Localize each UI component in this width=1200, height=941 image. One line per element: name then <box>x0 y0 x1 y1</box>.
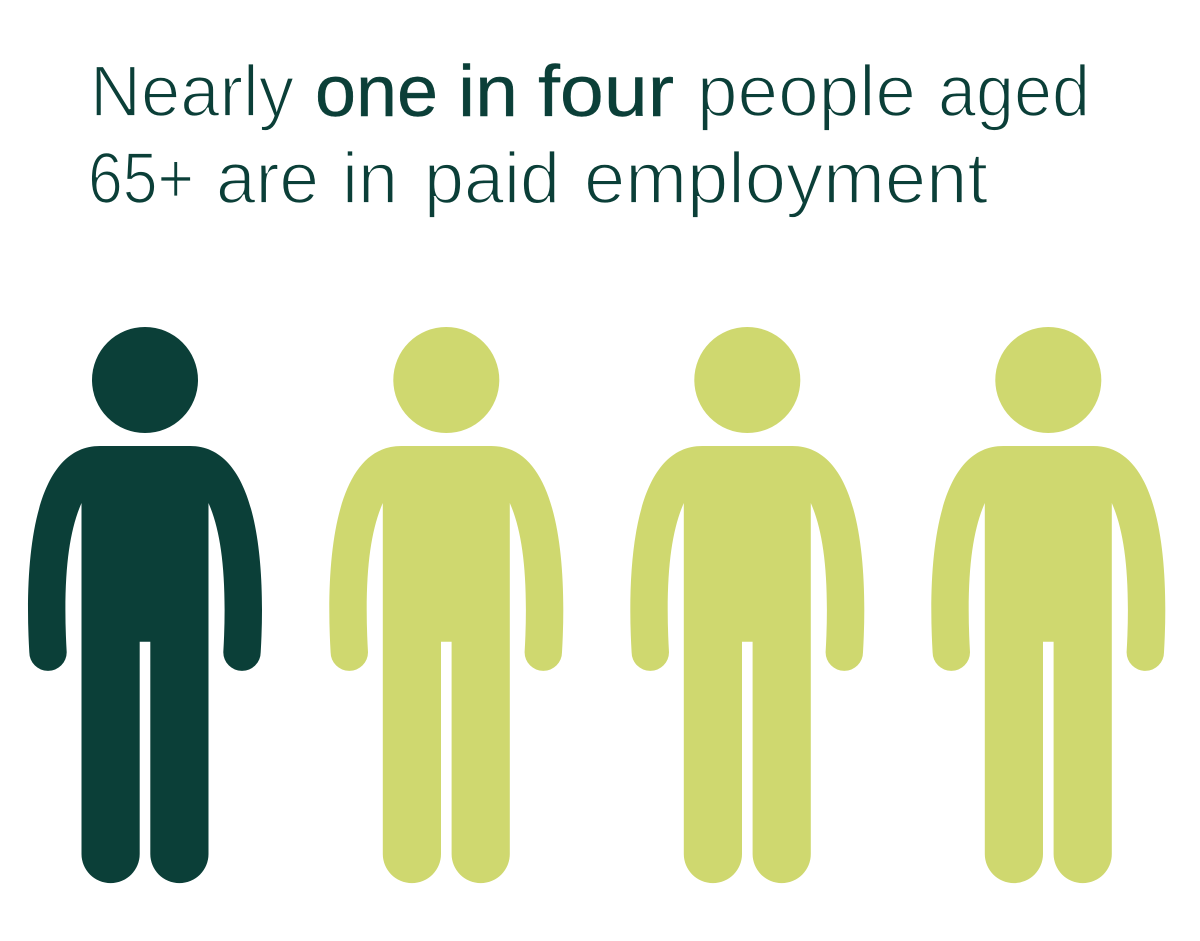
title: paid <box>424 139 560 219</box>
title <box>88 52 1090 219</box>
title: Nearly <box>90 52 294 132</box>
title: 65+ <box>88 139 194 219</box>
icon: person, light 2 <box>329 327 563 883</box>
title: people <box>697 52 916 132</box>
title: in <box>458 52 518 132</box>
title: four <box>538 52 674 132</box>
title: aged <box>938 52 1090 132</box>
icon: person, light 4 <box>931 327 1165 883</box>
icon: person, light 3 <box>630 327 864 883</box>
title: employment <box>584 139 988 219</box>
title: one <box>315 52 438 132</box>
icon: person, dark (employed) <box>28 327 262 883</box>
title: are <box>216 139 319 219</box>
title: in <box>342 139 398 219</box>
